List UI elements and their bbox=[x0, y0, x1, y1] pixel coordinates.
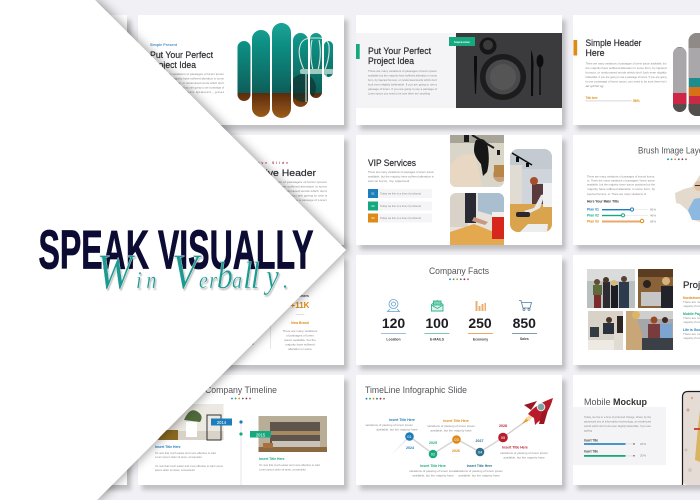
image: dark plate and cutlery bbox=[456, 33, 562, 108]
body text: available, but the majority lorem ipsum positions but the bbox=[587, 182, 655, 186]
body text: to use a passage of lorem ipsum, you need to be sure there isn't bbox=[586, 80, 667, 84]
fact: location bbox=[381, 300, 406, 342]
body text: or, There are many variations of passages f lorem ipsum bbox=[587, 178, 655, 182]
body text: believable. If you are going to use a passage of lorem. If you are going bbox=[586, 75, 667, 79]
icon: location pin bbox=[388, 300, 400, 312]
panel: project team photos bbox=[573, 255, 700, 365]
left item title: Insert Title Here bbox=[155, 445, 181, 449]
fact: e-mails: 100 bbox=[425, 315, 449, 331]
body text: advanced era of information technology, an evidenced bbox=[584, 420, 651, 424]
item 04 text: Insert Title Here bbox=[467, 464, 492, 468]
item 02 text: Insert Title Here bbox=[420, 464, 446, 468]
subtitle: win verbally: . bbox=[283, 266, 288, 293]
subtitle: win verbally: W bbox=[97, 245, 136, 300]
eyebrow: Simple Present bbox=[150, 43, 178, 47]
progress label: Title here bbox=[586, 96, 598, 100]
body text: There are many variations of passages of lorem ipsum bbox=[368, 170, 434, 174]
service row 2: Today we live in a time of profound bbox=[380, 204, 421, 208]
item 05 text: variations of passing of lorem ipsum bbox=[500, 451, 548, 455]
icon: rocket bbox=[522, 398, 553, 425]
body text: passage of lorem ipsum, you bbox=[150, 90, 225, 94]
stat body: majority have suffered bbox=[285, 342, 315, 346]
body text: look even slightly believable. If you are going to use a bbox=[240, 194, 327, 198]
body text: humour, or randomised words which don't look even slightly bbox=[586, 70, 667, 74]
image: living room bbox=[155, 404, 224, 440]
subtitle: win verbally: l bbox=[243, 255, 252, 297]
heading: Put Your Perfect bbox=[150, 50, 213, 60]
node 03: 03 bbox=[454, 437, 459, 442]
image: team at laptop bbox=[626, 311, 673, 350]
plan 02 bar: 46% bbox=[650, 214, 656, 218]
item 03 text bbox=[427, 419, 475, 432]
progress 1: Insert Title bbox=[584, 438, 598, 442]
panel: timeline infographic bbox=[356, 375, 562, 485]
image: red sofa in pills bbox=[673, 33, 700, 116]
service row 1 bbox=[368, 189, 432, 198]
left item body: Lorem ipsum dolor sit amet, consectetur bbox=[155, 455, 202, 459]
body text: majority have suffered alteration in some form, by bbox=[587, 187, 656, 191]
heading: TimeLine Infographic Slide bbox=[365, 385, 467, 395]
subtitle: win verbally: y bbox=[263, 258, 280, 296]
icon: shopping cart bbox=[519, 300, 532, 310]
item 05 text: available, but the majority have bbox=[503, 456, 545, 460]
eyebrow: Creative Slide bbox=[240, 161, 288, 165]
service row 2: 02 bbox=[371, 204, 375, 208]
colour dots bbox=[667, 158, 687, 160]
body text: passage of lorem. If you are going to use a passage of bbox=[368, 87, 437, 91]
progress 2 bbox=[584, 450, 646, 458]
body text: Lorem ipsum you need to be sure there isn't anything bbox=[368, 92, 430, 96]
progress 1: 20% bbox=[640, 442, 646, 446]
item 04 text bbox=[455, 464, 503, 478]
timeline node 2014 bbox=[239, 420, 243, 424]
node 01 bbox=[405, 432, 414, 441]
colour dots bbox=[366, 398, 385, 400]
right item title: Insert Title Here bbox=[259, 457, 285, 461]
year labels: 2024 bbox=[406, 446, 414, 450]
item 03 text: Insert Title Here bbox=[443, 419, 469, 423]
item 01 text: Insert Title Here bbox=[389, 418, 415, 422]
heading: VIP Services bbox=[368, 158, 416, 168]
progress 2: 20% bbox=[640, 454, 646, 458]
right item body: It's now that much easier and more effective to start bbox=[259, 463, 320, 467]
stat body: ipsum available, but the bbox=[284, 338, 316, 342]
node 04: 04 bbox=[478, 450, 483, 454]
image: woman with dark hair bbox=[450, 135, 507, 187]
subtitle: win verbally: a bbox=[232, 266, 242, 293]
subtitle: win verbally: n bbox=[146, 266, 156, 293]
body text: There are many variations of passages of lorem ipsum bbox=[240, 180, 328, 184]
panel: new brand stats bbox=[138, 255, 344, 365]
sub heading: Here Your Main Title bbox=[587, 200, 619, 204]
node 04 bbox=[476, 448, 484, 456]
timeline node 2015 bbox=[239, 432, 243, 436]
colour dots bbox=[449, 278, 469, 280]
fact: sales: Sales bbox=[520, 337, 529, 341]
panel: project idea with dark plate photo bbox=[356, 15, 562, 125]
body text: available, but the majority have suffered alteration in bbox=[368, 174, 434, 178]
item 02 text: available, but the majority have bbox=[412, 474, 454, 478]
progress 2: Insert Title bbox=[584, 450, 598, 454]
fact: e-mails bbox=[424, 300, 450, 342]
fact: location: Location bbox=[386, 338, 401, 342]
subtitle: win verbally: b bbox=[217, 255, 233, 297]
colour dots bbox=[231, 398, 251, 399]
subtitle: win verbally: e bbox=[199, 266, 208, 293]
image: colleagues at monitor bbox=[638, 269, 673, 308]
service row 2 bbox=[368, 202, 432, 210]
service row 3: Today we live in a time of profound bbox=[380, 216, 421, 220]
heading: Company Timeline bbox=[205, 385, 277, 395]
stat body: alteration in some bbox=[288, 347, 312, 351]
item 01 text: variations of passing of lorem ipsum bbox=[365, 423, 413, 427]
service row 3 bbox=[368, 214, 432, 222]
fact: economy: 250 bbox=[468, 315, 492, 331]
year tag 2014 bbox=[211, 418, 232, 426]
heading: Company Facts bbox=[429, 266, 489, 276]
panel: company timeline bbox=[138, 375, 344, 485]
service row 1: Today we live in a time of profound bbox=[380, 192, 421, 196]
subtitle: win verbally: l bbox=[251, 255, 260, 297]
body text: look even slightly believable. If you are going to use a passage of bbox=[150, 86, 224, 90]
item 02 text bbox=[409, 464, 457, 478]
fact: sales bbox=[512, 300, 537, 341]
year labels: 2026 bbox=[452, 449, 460, 453]
image: lounge with sofa bbox=[258, 416, 327, 452]
body text: look even slightly believable. If you are going to use a bbox=[368, 82, 437, 86]
item 03 text: variations of passing of lorem ipsum bbox=[427, 424, 475, 428]
panel: hidden left slide top bbox=[60, 15, 127, 125]
phone mockup bbox=[682, 391, 700, 485]
item 01 text bbox=[365, 418, 418, 432]
body text: some form, by injected bbox=[368, 179, 409, 183]
image: team at table with red cup bbox=[450, 193, 504, 245]
node 05: 05 bbox=[501, 435, 506, 440]
white arrow overlay bbox=[0, 0, 346, 500]
body text: Today, we live in a time of profound change, driven by the bbox=[584, 415, 651, 419]
year tag 2014: 2014 bbox=[217, 420, 227, 425]
accent bar bbox=[356, 44, 360, 59]
service row 3: 03 bbox=[371, 216, 375, 220]
item 04 text: available, but the majority have bbox=[458, 474, 500, 478]
left item body: It's now that much easier and more effective to start Lorem bbox=[155, 464, 223, 468]
fact: economy: Economy bbox=[473, 338, 488, 342]
fact: economy bbox=[468, 301, 493, 342]
panel: hidden left slide bottom bbox=[60, 375, 127, 485]
plan 03 bar bbox=[587, 219, 656, 224]
subtitle: win verbally: V bbox=[172, 245, 202, 300]
tag bbox=[449, 37, 475, 46]
body text: going bbox=[584, 428, 592, 432]
item 05 text: Insert Title Here bbox=[502, 446, 528, 450]
year tag 2015 bbox=[250, 431, 271, 438]
plan 02 bar bbox=[587, 214, 656, 218]
stat body: There are many variations bbox=[283, 329, 318, 333]
panel: vip services bbox=[356, 135, 562, 245]
stat label: Customers bbox=[291, 294, 309, 298]
left item body: It's now that much easier and more effective to start bbox=[155, 451, 216, 455]
heading: Project Idea bbox=[150, 60, 196, 70]
item 01 text: available, but the majority have bbox=[376, 428, 418, 432]
plan 01 bar bbox=[587, 208, 656, 212]
heading: Here bbox=[586, 48, 604, 58]
item: orange bbox=[683, 296, 700, 308]
body text: There are many variations of passages of kumod kumor, bbox=[587, 174, 655, 178]
panel: simple header bbox=[573, 15, 700, 125]
progress bar: 56% bbox=[633, 99, 640, 103]
node 01: 01 bbox=[407, 434, 412, 439]
plan 03 bar: Plan 03 bbox=[587, 220, 599, 224]
item: blue bbox=[683, 328, 700, 340]
panel: company facts bbox=[356, 255, 562, 365]
item 05 text bbox=[500, 446, 548, 460]
body text: words which don't look even slightly believable. If you are bbox=[584, 424, 651, 428]
body text: form, by injected humour, or randomised words which don't bbox=[240, 189, 327, 193]
node 03 bbox=[452, 435, 461, 444]
heading: Creative Header bbox=[240, 168, 316, 178]
image: office meeting bbox=[588, 311, 623, 350]
year labels: 2028 bbox=[499, 424, 507, 428]
fact: sales: 850 bbox=[513, 315, 536, 331]
stat heading: New Brand bbox=[291, 321, 309, 325]
image: team standing bbox=[587, 269, 635, 308]
item 03 text: available, but the majority have bbox=[430, 428, 472, 432]
item 02 text: variations of passing of lorem ipsum bbox=[409, 469, 457, 473]
service row 1: 01 bbox=[371, 192, 375, 196]
tag: Impressive bbox=[454, 40, 470, 44]
heading: Mobile Mockup bbox=[584, 397, 648, 407]
plan 01 bar: Plan 01 bbox=[587, 208, 599, 212]
grey card bbox=[573, 407, 666, 465]
title: speak visually: SPEAK VISUALLY bbox=[38, 218, 314, 280]
fact: e-mails: E-MAILS bbox=[430, 338, 445, 342]
image: brush portrait bbox=[675, 175, 700, 222]
left item body: ipsum dolor sit amet, consectetur bbox=[155, 468, 195, 472]
body text: available,but the majority have suffered alteration in some bbox=[368, 74, 437, 78]
item: green bbox=[683, 312, 700, 324]
accent bar bbox=[574, 40, 577, 56]
fact: location: 120 bbox=[382, 315, 405, 331]
body text: There are many variations of passages of lorem ipsum available, but bbox=[586, 62, 667, 66]
neighbouring stat body: passages of bbox=[240, 342, 254, 346]
icon: bar chart bbox=[476, 301, 486, 311]
body text: anything bbox=[586, 84, 604, 88]
node 02 bbox=[429, 450, 437, 458]
year tag 2015: 2015 bbox=[256, 432, 266, 437]
right item body: Lorem ipsum dolor sit amet, consectetur bbox=[259, 468, 306, 472]
panel: brush image layout bbox=[573, 135, 700, 245]
body text: available, but the majority have suffered alteration in some bbox=[150, 76, 224, 80]
zigzag line bbox=[390, 418, 530, 456]
plan 03 bar: 96% bbox=[650, 220, 656, 224]
progress 1 bbox=[584, 438, 646, 446]
item 04 text: variations of passing of lorem ipsum bbox=[455, 469, 503, 473]
year labels bbox=[406, 424, 507, 453]
stat number: +11K bbox=[291, 301, 310, 310]
body text: form, by injected humour, or randomised words which don't bbox=[368, 78, 437, 82]
heading: Put Your Perfect bbox=[368, 46, 431, 56]
image: colleagues with laptop bbox=[510, 149, 552, 232]
body text: passage of lorem ipsum, you need to use a passage of Lorem bbox=[240, 198, 328, 202]
body text: injected humour, or. There are many variations of bbox=[587, 192, 646, 196]
year labels: 2025 bbox=[429, 441, 437, 445]
heading: Simple Header bbox=[586, 38, 642, 48]
stat body: of passages of lorem bbox=[286, 334, 314, 338]
panel: mobile mockup bbox=[573, 375, 700, 485]
body text: available, but the majority have suffered alteration in some bbox=[240, 184, 327, 188]
body text: the majority have suffered alteration in some form, by injected bbox=[586, 66, 667, 70]
node 02: 02 bbox=[431, 452, 436, 456]
panel: put your perfect project idea with pills bbox=[138, 15, 344, 125]
heading: Project Idea bbox=[368, 56, 414, 66]
plan 01 bar: 86% bbox=[650, 208, 656, 212]
icon: envelope bbox=[432, 300, 443, 311]
body text: There are many variations of passages of lorem ipsum bbox=[368, 69, 437, 73]
body text: There are many variations of passages of lorem ipsum bbox=[150, 72, 225, 76]
image: chair in rounded pills bbox=[238, 23, 333, 118]
panel: creative header bbox=[138, 135, 344, 245]
body text: form, by injected humour, or randomised words which don't bbox=[150, 81, 224, 85]
plan 02 bar: Plan 02 bbox=[587, 214, 599, 218]
subtitle: win verbally: r bbox=[209, 266, 217, 293]
node 05 bbox=[498, 433, 508, 442]
subtitle: win verbally: i bbox=[136, 266, 142, 293]
year labels: 2027 bbox=[476, 439, 484, 443]
